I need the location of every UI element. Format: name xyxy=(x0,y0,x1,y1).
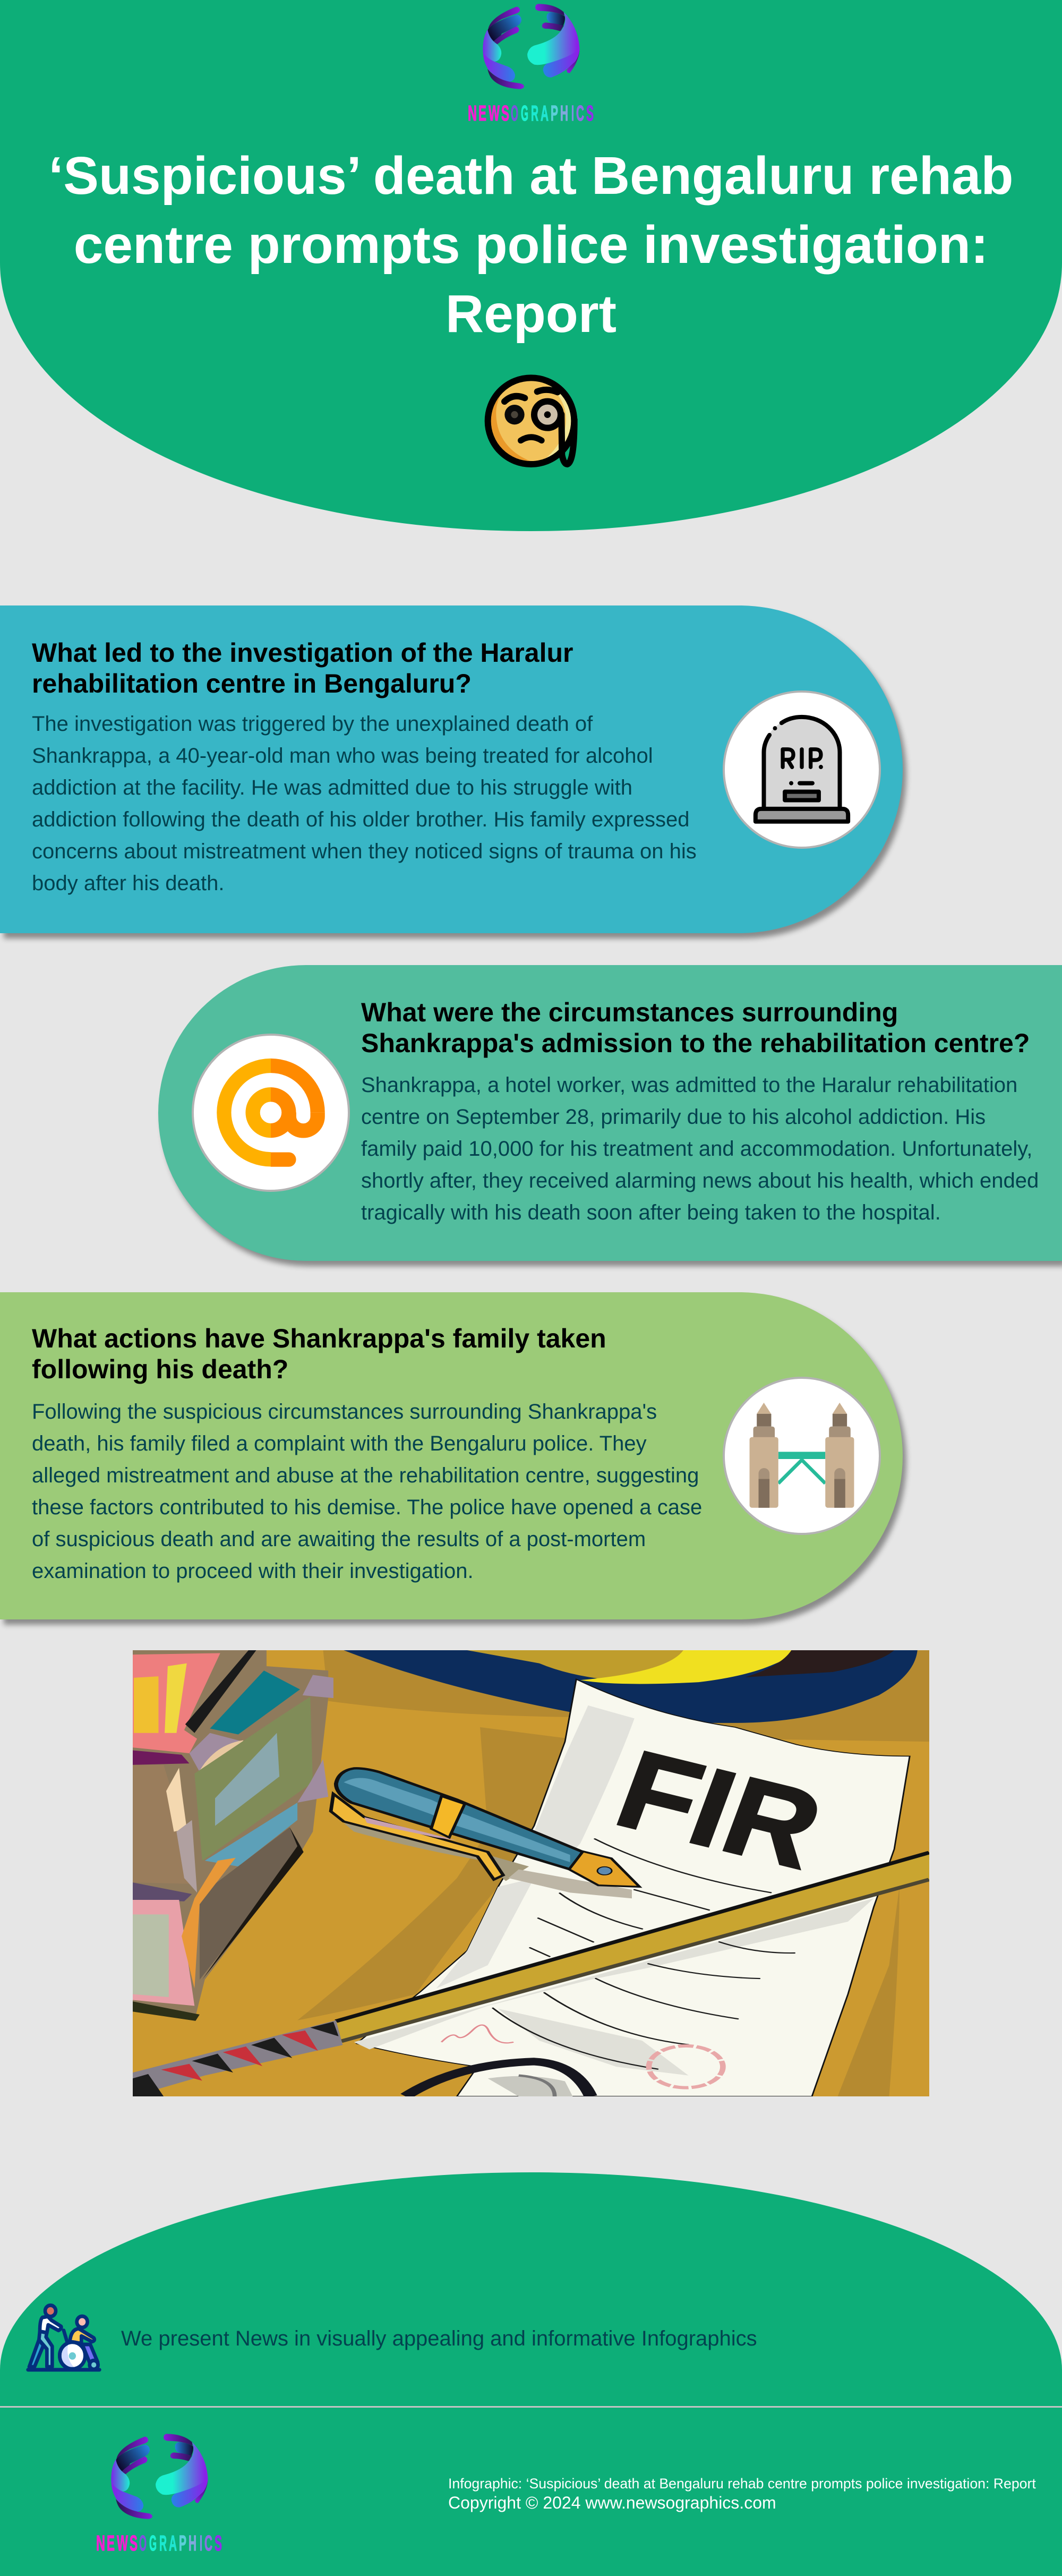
body text: centre on September 28, primarily due to his alcohol addiction. His xyxy=(361,1105,986,1129)
heading xyxy=(361,997,1030,1058)
logo: footer newsographics: S xyxy=(130,2531,138,2555)
title xyxy=(48,146,1014,344)
body text: body after his death. xyxy=(32,872,224,895)
footer panel xyxy=(0,2172,1062,2576)
paper lines xyxy=(493,1839,794,2069)
logo: newsographics: N xyxy=(468,101,477,125)
title: centre prompts police investigation: xyxy=(74,215,988,275)
heading: Shankrappa's admission to the rehabilitation centre? xyxy=(361,1028,1030,1058)
logo: footer newsographics: N xyxy=(96,2531,105,2555)
logo: footer newsographics: A xyxy=(169,2531,177,2555)
logo: newsographics: A xyxy=(541,101,549,125)
footer credit line: Infographic: ‘Suspicious’ death at Bengaluru rehab centre prompts police investigation: Report xyxy=(448,2476,1036,2492)
icon: caregiver pushing wheelchair xyxy=(26,2303,101,2372)
logo: newsographics: O xyxy=(511,101,518,125)
copyright: Copyright © 2024 www.newsographics.com xyxy=(448,2493,776,2512)
logo: newsographics: W xyxy=(489,101,500,125)
body text: alleged mistreatment and abuse at the rehabilitation centre, suggesting xyxy=(32,1464,699,1487)
body text xyxy=(361,1073,1039,1224)
body text: Shankrappa, a 40-year-old man who was being treated for alcohol xyxy=(32,744,653,767)
handcuffs xyxy=(406,2061,590,2096)
logo: newsographics: E xyxy=(478,101,486,125)
title: ‘Suspicious’ death at Bengaluru rehab xyxy=(48,146,1014,206)
body text xyxy=(32,712,697,895)
header banner xyxy=(0,0,1062,531)
shadows on the table xyxy=(323,1650,929,1742)
heading xyxy=(32,1324,606,1384)
logo: newsographics: P xyxy=(551,101,558,125)
logo: footer newsographics: E xyxy=(107,2531,115,2555)
body text: of suspicious death and are awaiting the results of a post-mortem xyxy=(32,1528,646,1551)
heading: What led to the investigation of the Haralur xyxy=(32,638,573,668)
panel: what led to the investigation xyxy=(0,605,903,933)
body text: these factors contributed to his demise. The police have opened a case xyxy=(32,1496,702,1519)
logo: footer newsographics: S xyxy=(215,2531,222,2555)
stack of books xyxy=(133,1650,328,2020)
heading xyxy=(32,638,573,698)
icon: RIP tombstone xyxy=(723,690,881,849)
body text: examination to proceed with their investigation. xyxy=(32,1559,474,1583)
body text: death, his family filed a complaint with the Bengaluru police. They xyxy=(32,1432,647,1455)
logo: footer newsographics xyxy=(96,2434,222,2555)
police cap xyxy=(344,1650,918,1723)
logo: newsographics: S xyxy=(586,101,594,125)
body text: addiction at the facility. He was admitted due to his struggle with xyxy=(32,776,632,799)
signature and stamp xyxy=(441,2025,513,2043)
logo: footer newsographics: I xyxy=(200,2531,202,2555)
paper sheet xyxy=(357,1679,910,2096)
tagline: We present News in visually appealing and informative Infographics xyxy=(121,2327,757,2350)
heading: What were the circumstances surrounding xyxy=(361,997,898,1027)
icon: at sign xyxy=(192,1034,350,1192)
panel: circumstances of admission xyxy=(158,965,1062,1261)
baton xyxy=(336,1854,929,2041)
body text: The investigation was triggered by the unexplained death of xyxy=(32,712,593,736)
title: Report xyxy=(446,284,616,344)
icon: monocle face emoji xyxy=(484,374,578,467)
body text: shortly after, they received alarming news about his health, which ended xyxy=(361,1169,1039,1192)
panel: actions by the family xyxy=(0,1292,903,1619)
heading: What actions have Shankrappa's family taken xyxy=(32,1324,606,1353)
body text: Following the suspicious circumstances surrounding Shankrappa's xyxy=(32,1400,657,1423)
logo: footer newsographics: O xyxy=(139,2531,147,2555)
logo: footer newsographics: G xyxy=(149,2531,157,2555)
body text: family paid 10,000 for his treatment and accommodation. Unfortunately, xyxy=(361,1137,1032,1161)
body text xyxy=(32,1400,702,1583)
logo: footer newsographics: R xyxy=(159,2531,167,2555)
logo: footer newsographics: H xyxy=(189,2531,196,2555)
logo: newsographics: I xyxy=(571,101,574,125)
logo: newsographics: R xyxy=(531,101,538,125)
body text: Shankrappa, a hotel worker, was admitted to the Haralur rehabilitation xyxy=(361,1073,1017,1097)
body text: tragically with his death soon after being taken to the hospital. xyxy=(361,1201,941,1224)
logo: newsographics xyxy=(468,4,594,125)
heading: following his death? xyxy=(32,1354,288,1384)
logo: newsographics: H xyxy=(560,101,568,125)
body text: addiction following the death of his older brother. His family expressed xyxy=(32,808,689,831)
divider xyxy=(0,2406,1062,2408)
logo: footer newsographics: W xyxy=(117,2531,128,2555)
icon: twin tower bridge xyxy=(723,1377,881,1535)
logo: footer newsographics: C xyxy=(204,2531,212,2555)
body text: concerns about mistreatment when they noticed signs of trauma on his xyxy=(32,840,697,863)
fountain pen xyxy=(344,1823,529,1881)
illustration: FIR document with pen and baton xyxy=(133,1650,929,2096)
logo: newsographics: C xyxy=(576,101,584,125)
FIR lettering: FIR xyxy=(602,1727,837,1892)
logo: newsographics: S xyxy=(501,101,509,125)
logo: newsographics: G xyxy=(521,101,528,125)
heading: rehabilitation centre in Bengaluru? xyxy=(32,669,472,698)
logo: footer newsographics: P xyxy=(179,2531,186,2555)
